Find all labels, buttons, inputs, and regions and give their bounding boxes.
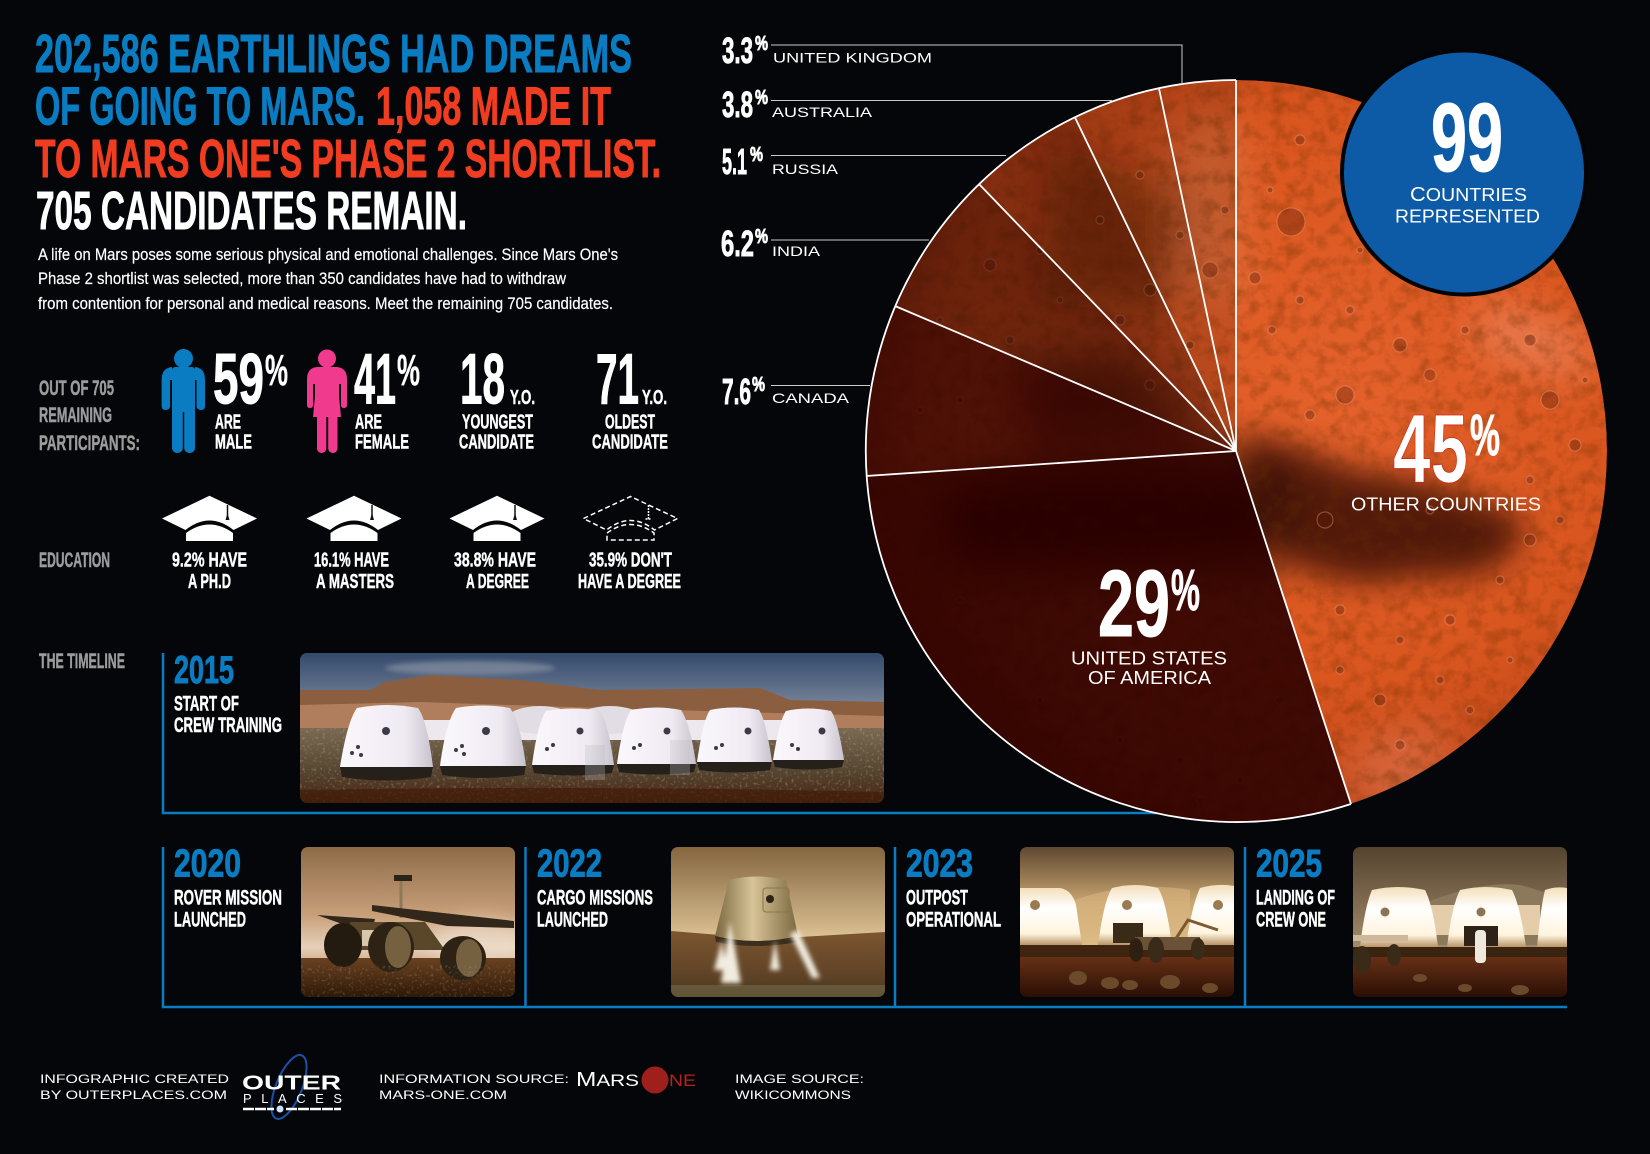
logo: Outer Places: PLACES <box>243 1091 342 1106</box>
logo: Outer Places: OUTER <box>242 1072 342 1094</box>
label: United States 29%: UNITED STATES <box>1071 648 1227 668</box>
stat: 59% male: % <box>265 346 288 395</box>
milestone: 2023 <box>906 842 1001 932</box>
milestone: 2022: CARGO MISSIONS <box>537 886 653 910</box>
milestone: 2022 <box>537 842 653 932</box>
callout: 99 countries represented: COUNTRIES <box>1410 184 1527 206</box>
label: India 6.2%: 6.2 <box>721 223 754 264</box>
label: Australia 3.8%: 3.8 <box>722 84 753 125</box>
slice: Russia <box>979 118 1236 451</box>
intro paragraph: A life on Mars poses some serious physical and emotional challenges. Since Mars One's <box>38 245 618 264</box>
participants heading: REMAINING <box>39 404 112 427</box>
photo: Mars habitat pods on desert <box>300 653 884 803</box>
slice: United States <box>866 451 1351 822</box>
milestone: 2023: OUTPOST <box>906 886 968 910</box>
title: TO MARS ONE'S PHASE 2 SHORTLIST. <box>35 129 661 189</box>
milestone: 2020: ROVER MISSION <box>174 886 282 910</box>
participants heading <box>39 377 140 455</box>
label: United Kingdom 3.3%: UNITED KINGDOM <box>773 50 932 66</box>
label: United States 29% <box>1071 551 1227 688</box>
education: degree: 38.8% HAVE <box>454 550 536 572</box>
participants heading: PARTICIPANTS: <box>39 432 140 455</box>
education: no degree <box>578 496 681 593</box>
label: other countries 45% <box>1351 394 1541 514</box>
slice: India <box>895 184 1236 451</box>
planet surface <box>860 75 1610 825</box>
label: United Kingdom 3.3%: % <box>755 33 768 55</box>
label: Canada 7.6%: CANADA <box>772 390 850 406</box>
milestone: 2022: LAUNCHED <box>537 908 608 932</box>
footer: information source <box>379 1074 569 1102</box>
footer: image source <box>735 1074 864 1102</box>
milestone: 2025: LANDING OF <box>1256 886 1335 910</box>
footer: credit <box>40 1074 229 1102</box>
logo: Outer Places <box>242 1051 342 1123</box>
label: United States 29%: 29 <box>1098 551 1170 657</box>
education: PhD: 9.2% HAVE <box>172 550 247 572</box>
title <box>35 24 661 241</box>
education: degree <box>450 496 544 593</box>
label: United States 29%: OF AMERICA <box>1088 668 1211 688</box>
stat: 41% female: % <box>397 346 420 395</box>
logo: Mars One: NE <box>669 1071 696 1090</box>
education: no degree: 35.9% DON'T <box>589 550 672 572</box>
footer: image source: IMAGE SOURCE: <box>735 1074 864 1086</box>
education: masters: 16.1% HAVE <box>314 550 389 572</box>
milestone: 2015: CREW TRAINING <box>174 714 282 737</box>
milestone: 2025: CREW ONE <box>1256 908 1326 932</box>
icon: graduation cap <box>306 496 402 541</box>
label: India 6.2%: % <box>755 226 768 248</box>
label: Russia 5.1%: RUSSIA <box>772 161 839 177</box>
stat: oldest candidate: 71 <box>596 340 639 420</box>
milestone: 2023: 2023 <box>906 842 973 886</box>
education: masters <box>306 496 402 593</box>
timeline frame upper <box>163 653 1160 813</box>
footer: information source: MARS-ONE.COM <box>379 1090 507 1102</box>
icon: dashed graduation cap <box>584 496 678 540</box>
education: PhD <box>162 496 257 593</box>
intro paragraph: from contention for personal and medical reasons. Meet the remaining 705 candidates. <box>38 294 613 313</box>
stat: 59% male: MALE <box>215 432 252 454</box>
stat: oldest candidate <box>592 340 668 454</box>
label: United Kingdom 3.3% <box>722 30 932 71</box>
photo: cargo lander <box>671 847 885 997</box>
title: OF GOING TO MARS. <box>35 76 365 136</box>
milestone: 2020: LAUNCHED <box>174 908 246 932</box>
stat: oldest candidate: OLDEST <box>605 412 655 434</box>
icon: male figure <box>162 349 205 453</box>
label: India 6.2% <box>721 223 821 264</box>
label: Russia 5.1%: % <box>750 144 763 166</box>
label: Russia 5.1%: 5.1 <box>722 141 747 182</box>
label: other countries 45%: % <box>1470 403 1500 468</box>
title: 705 CANDIDATES REMAIN. <box>36 181 467 241</box>
stat: 59% male: 59 <box>213 340 264 420</box>
education heading: EDUCATION <box>39 549 110 572</box>
photo: outpost with rover <box>1020 847 1234 997</box>
stat: 41% female: FEMALE <box>355 432 409 454</box>
stat: 41% female <box>354 340 420 454</box>
slice: Australia <box>1075 88 1236 451</box>
milestone: 2015: START OF <box>174 692 239 716</box>
label: Russia 5.1% <box>722 141 839 182</box>
logo: Mars One: MARS <box>576 1069 639 1091</box>
footer: credit: INFOGRAPHIC CREATED <box>40 1074 229 1086</box>
pie chart: Mars country shares <box>860 75 1610 825</box>
icon: female figure <box>307 350 347 453</box>
photo: landing of crew one <box>1353 847 1567 997</box>
milestone: 2020 <box>174 842 282 932</box>
milestone: 2020: 2020 <box>174 842 241 886</box>
callout: 99 countries represented <box>1342 50 1586 294</box>
education: masters: A MASTERS <box>316 571 394 593</box>
callout: 99 countries represented: 99 <box>1431 83 1503 192</box>
education: degree: A DEGREE <box>466 571 529 593</box>
milestone: 2022: 2022 <box>537 842 602 886</box>
stat: 41% female: ARE <box>355 412 382 434</box>
footer: credit: BY OUTERPLACES.COM <box>40 1090 227 1102</box>
participants heading: OUT OF 705 <box>39 377 114 400</box>
title: 202,586 EARTHLINGS HAD DREAMS <box>35 24 632 84</box>
stat: 59% male <box>213 340 288 454</box>
slice: United Kingdom <box>1159 80 1236 451</box>
slice borders <box>866 80 1351 822</box>
title: 1,058 MADE IT <box>376 76 611 136</box>
label: Canada 7.6% <box>722 371 850 412</box>
label: Australia 3.8%: % <box>755 87 768 109</box>
label: India 6.2%: INDIA <box>772 243 821 259</box>
label: other countries 45%: OTHER COUNTRIES <box>1351 494 1541 514</box>
timeline frame lower <box>163 847 1567 1007</box>
label: Australia 3.8%: AUSTRALIA <box>772 104 873 120</box>
icon: graduation cap <box>162 496 257 541</box>
slice: Canada <box>865 306 1236 476</box>
stat: youngest candidate: 18 <box>460 340 505 420</box>
label: Canada 7.6%: 7.6 <box>722 371 751 412</box>
milestone: 2025: 2025 <box>1256 842 1322 886</box>
leader lines <box>771 45 1182 386</box>
stat: oldest candidate: Y.O. <box>642 387 667 409</box>
logo: Mars One <box>576 1066 696 1094</box>
stat: 41% female: 41 <box>354 340 396 420</box>
stat: youngest candidate: CANDIDATE <box>459 432 534 454</box>
intro paragraph <box>38 245 618 313</box>
milestone: 2015: 2015 <box>174 649 234 692</box>
education: PhD: A PH.D <box>188 571 231 593</box>
stat: oldest candidate: CANDIDATE <box>592 432 668 454</box>
photo: rover on Mars <box>301 847 530 997</box>
icon: graduation cap <box>450 496 544 541</box>
label: United Kingdom 3.3%: 3.3 <box>722 30 753 71</box>
education: no degree: HAVE A DEGREE <box>578 571 681 593</box>
footer: image source: WIKICOMMONS <box>735 1090 851 1102</box>
callout: 99 countries represented: REPRESENTED <box>1395 206 1540 226</box>
label: Australia 3.8% <box>722 84 873 125</box>
milestone: 2023: OPERATIONAL <box>906 908 1001 932</box>
milestone: 2025 <box>1256 842 1335 932</box>
label: Canada 7.6%: % <box>752 374 765 396</box>
stat: 59% male: ARE <box>215 412 241 434</box>
label: other countries 45%: 45 <box>1393 394 1468 503</box>
milestone: 2015 <box>174 649 282 737</box>
stat: youngest candidate: YOUNGEST <box>462 412 533 434</box>
stat: youngest candidate: Y.O. <box>510 387 535 409</box>
label: United States 29%: % <box>1171 558 1200 623</box>
stat: youngest candidate <box>459 340 535 454</box>
intro paragraph: Phase 2 shortlist was selected, more than 350 candidates have had to withdraw <box>38 269 567 288</box>
footer: information source: INFORMATION SOURCE: <box>379 1074 569 1086</box>
timeline heading: THE TIMELINE <box>39 650 125 673</box>
